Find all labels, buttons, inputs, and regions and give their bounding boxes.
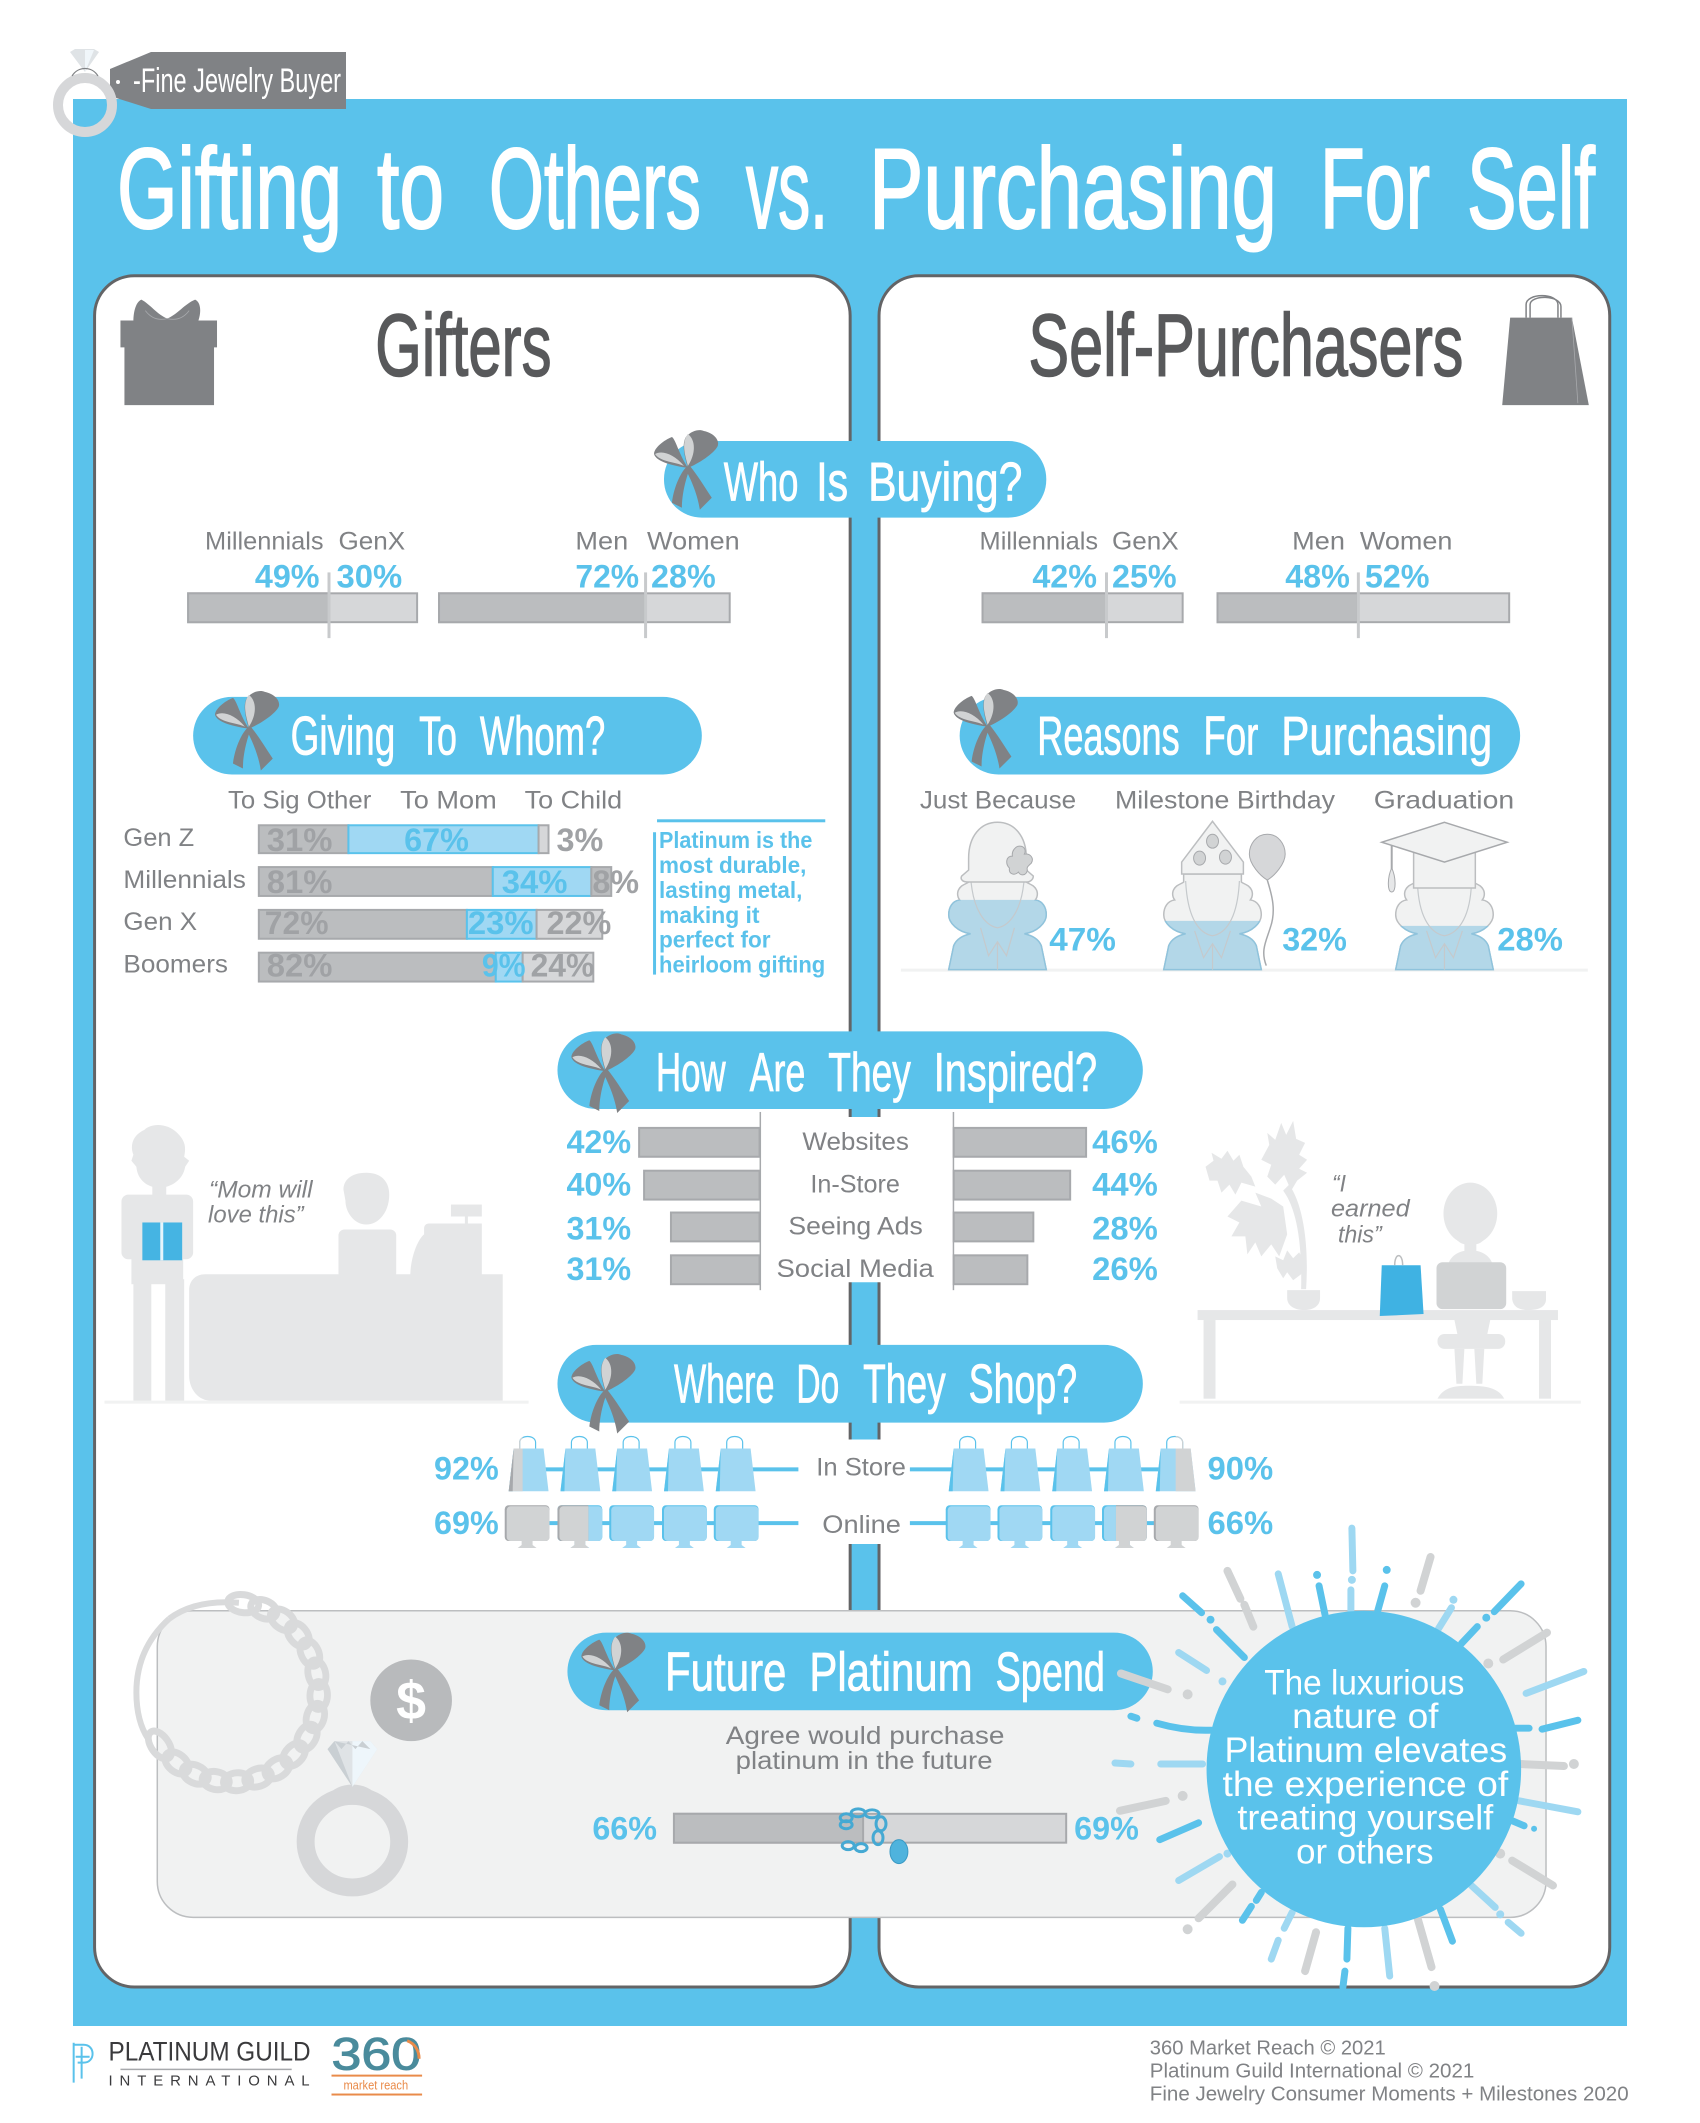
chart: giving to whom: Gen Z (123, 824, 194, 852)
callout circle: luxurious nature: or others (1296, 1833, 1434, 1872)
chart: gifters generation split: Millennials (205, 528, 324, 556)
tag: Fine Jewelry Buyer: -Fine Jewelry Buyer (133, 62, 341, 100)
chart: giving to whom: Gen X (123, 908, 198, 936)
chart: self-purchasers gender split: Men (1292, 528, 1345, 556)
chart: giving to whom: 82% (267, 947, 332, 984)
figure: Just Because: Just Because (920, 786, 1076, 814)
chart: gifters gender split: 28% (651, 557, 716, 594)
chart: how are they inspired: 31% (566, 1209, 631, 1246)
chart: online monitors: 66% (1208, 1504, 1273, 1541)
chart: how are they inspired: 28% (1092, 1209, 1158, 1246)
title: to (377, 126, 444, 253)
pill: Who Is Buying: Buying? (868, 451, 1022, 513)
panel: self-purchasers (879, 276, 1610, 1987)
chart: self-purchasers generation split (980, 528, 1183, 638)
chart: future spend bar: 66% (592, 1810, 657, 1847)
quote: I earned this: earned (1331, 1196, 1410, 1223)
chart: self-purchasers generation split: Millennials (980, 528, 1098, 556)
content area (74, 276, 1629, 2106)
title: Purchasing (869, 126, 1277, 253)
callout: Platinum durable: most durable, (659, 852, 806, 878)
chart: giving to whom: 72% (265, 904, 329, 941)
panel: gifters (95, 276, 850, 1987)
quote: I earned this: this” (1338, 1221, 1383, 1248)
illustration: gift buyer at counter (105, 1125, 529, 1404)
figure: Milestone Birthday: 32% (1282, 921, 1347, 958)
text: agree would purchase (726, 1722, 1004, 1775)
title: Gifting (117, 126, 342, 253)
callout circle: luxurious nature: nature of (1292, 1697, 1439, 1736)
chart: online monitors: 69% (434, 1504, 499, 1541)
chart: giving to whom: 31% (267, 821, 332, 858)
pill: Who Is Buying (654, 430, 1046, 518)
floor line: desk (1180, 1401, 1581, 1404)
white breaks in centre strip (841, 1117, 882, 1544)
logo: Platinum Guild International: PLATINUM GUILD (109, 2037, 311, 2067)
chart: giving to whom: 22% (547, 904, 611, 941)
chart: giving to whom: To Child (525, 786, 622, 814)
icon: shopping bag (1502, 296, 1589, 405)
footer credits (1150, 2038, 1629, 2106)
pill: Reasons For Purchasing: For (1204, 705, 1258, 767)
pill: Where Do They Shop: They (863, 1353, 946, 1415)
figure: Milestone Birthday (1115, 786, 1347, 970)
callout: Platinum durable: perfect for (659, 927, 771, 953)
pill: Giving To Whom: To (419, 705, 457, 767)
chart: self-purchasers gender split: 52% (1365, 557, 1430, 594)
chart: gifters generation split: 49% (255, 557, 320, 594)
chart: gifters generation split: 30% (336, 557, 402, 594)
illustration: self-purchaser at desk (1198, 1121, 1558, 1399)
chart: gifters gender split (439, 528, 740, 638)
logo: 360 market reach: market reach (343, 2078, 408, 2093)
chart: self-purchasers gender split (1217, 528, 1509, 638)
title: Others (489, 126, 701, 253)
callout: Platinum durable: Platinum is the (659, 827, 812, 853)
chart: how are they inspired (566, 1112, 1158, 1290)
chart: how are they inspired: 31% (566, 1250, 631, 1287)
pill: Reasons For Purchasing: Purchasing (1281, 705, 1492, 767)
quote: I earned this (1331, 1171, 1410, 1248)
text: agree would purchase: platinum in the future (736, 1747, 993, 1775)
quote: I earned this: “I (1332, 1171, 1346, 1198)
icon: diamond ring on tag (58, 49, 112, 132)
pill: Who Is Buying: Who (724, 451, 798, 513)
chart: future spend bar: 69% (1074, 1810, 1139, 1847)
chart: giving to whom: 23% (468, 904, 534, 941)
chart: self-purchasers generation split: 25% (1112, 557, 1177, 594)
pill: Future Platinum Spend: Platinum (809, 1640, 973, 1702)
chart: giving to whom: 3% (556, 821, 603, 858)
chart: future spend bar (592, 1809, 1139, 1864)
logo: 360 market reach (332, 2029, 422, 2096)
title: For (1320, 126, 1430, 253)
figure: Graduation: 28% (1497, 921, 1563, 958)
pill: Future Platinum Spend: Future (665, 1640, 786, 1702)
chart: gifters generation split (188, 528, 417, 638)
icon: dollar coin: $ (396, 1671, 426, 1731)
title (117, 126, 1595, 253)
chart: how are they inspired: 40% (566, 1166, 631, 1203)
chart: how are they inspired: 26% (1092, 1250, 1158, 1287)
chart: self-purchasers generation split: GenX (1112, 528, 1179, 556)
chart: how are they inspired: Social Media (776, 1255, 934, 1283)
logo: 360 market reach: 360 (332, 2029, 421, 2080)
icon: dollar coin (370, 1659, 452, 1741)
callout: Platinum durable: heirloom gifting (659, 952, 825, 978)
chart: in store bags (434, 1437, 1273, 1491)
pill: Giving To Whom: Giving (291, 705, 395, 767)
panel: future spend (157, 1611, 1546, 1917)
chart: gifters gender split: Women (647, 528, 740, 556)
chart: giving to whom: 24% (531, 947, 594, 984)
chart: in store bags: In Store (816, 1453, 906, 1481)
chart: how are they inspired: 46% (1092, 1123, 1158, 1160)
figure: Milestone Birthday: Milestone Birthday (1115, 786, 1336, 814)
pill: Future Platinum Spend (567, 1633, 1153, 1712)
callout: Platinum durable (653, 819, 825, 978)
chart: how are they inspired: 42% (566, 1123, 631, 1160)
chart: in store bags: 92% (434, 1449, 499, 1486)
pill: Giving To Whom (193, 691, 702, 774)
chart: how are they inspired: Websites (802, 1128, 909, 1156)
chart: giving to whom (123, 786, 639, 984)
callout circle: luxurious nature: the experience of (1222, 1765, 1509, 1804)
footer credits: Platinum Guild International © 2021 (1150, 2061, 1474, 2083)
pill: How Are They Inspired: Inspired? (934, 1041, 1097, 1103)
footer credits: 360 Market Reach © 2021 (1150, 2038, 1386, 2060)
chart: giving to whom: To Sig Other (228, 786, 371, 814)
pill: Where Do They Shop: Shop? (969, 1353, 1077, 1415)
tag: Fine Jewelry Buyer (110, 52, 346, 109)
pill: Reasons For Purchasing: Reasons (1037, 705, 1180, 767)
title: Self (1467, 126, 1595, 253)
chart: online monitors (434, 1504, 1273, 1548)
figure: Graduation (1374, 786, 1563, 970)
chart: giving to whom: 67% (404, 821, 469, 858)
logo: Platinum Guild International: INTERNATIONAL (109, 2073, 310, 2090)
pill: Where Do They Shop: Where (674, 1353, 774, 1415)
pill: Giving To Whom: Whom? (480, 705, 605, 767)
chart: gifters gender split: Men (575, 528, 628, 556)
chart: self-purchasers generation split: 42% (1032, 557, 1097, 594)
callout circle: luxurious nature: Platinum elevates (1224, 1731, 1507, 1770)
callout circle: luxurious nature: The luxurious (1264, 1663, 1464, 1702)
callout: Platinum durable: lasting metal, (659, 877, 802, 903)
quote: Mom will love this: love this” (208, 1201, 305, 1228)
title: vs. (746, 126, 828, 253)
pill: How Are They Inspired: Are (750, 1041, 805, 1103)
figure: Just Because (920, 786, 1116, 970)
sunburst rays (1115, 1528, 1584, 1991)
figure: Graduation: Graduation (1374, 786, 1514, 814)
chart: how are they inspired: 44% (1092, 1166, 1158, 1203)
chart: giving to whom: 9% (482, 947, 526, 984)
chart: self-purchasers gender split: 48% (1285, 557, 1350, 594)
pill: How Are They Inspired: They (828, 1041, 911, 1103)
chart: gifters generation split: GenX (338, 528, 406, 556)
pill: Who Is Buying: Is (816, 451, 848, 513)
text: agree would purchase: Agree would purchase (726, 1722, 1004, 1750)
chart: giving to whom: Boomers (123, 951, 228, 979)
chart: in store bags: 90% (1208, 1449, 1273, 1486)
logo: Platinum Guild International (74, 2037, 311, 2090)
pill: How Are They Inspired (557, 1031, 1143, 1113)
heading: Self-Purchasers: Self-Purchasers (1028, 295, 1463, 394)
quote: Mom will love this (208, 1177, 313, 1228)
chart: how are they inspired: Seeing Ads (788, 1212, 923, 1240)
chart: self-purchasers gender split: Women (1360, 528, 1452, 556)
chart: giving to whom: 8% (592, 863, 639, 900)
heading: Gifters: Gifters (375, 295, 552, 394)
pill: Where Do They Shop: Do (796, 1353, 839, 1415)
chart: giving to whom: To Mom (400, 786, 497, 814)
floor line: reasons (901, 969, 1588, 972)
icon: platinum ring (306, 1741, 399, 1887)
chart: giving to whom: 81% (267, 863, 332, 900)
icon: chain bracelet (136, 1593, 328, 1792)
chart: how are they inspired: In-Store (810, 1171, 900, 1199)
pill: How Are They Inspired: How (656, 1041, 726, 1103)
quote: Mom will love this: “Mom will (209, 1177, 313, 1204)
chart: giving to whom: Millennials (123, 866, 246, 894)
footer credits: Fine Jewelry Consumer Moments + Milestones 2020 (1150, 2084, 1629, 2106)
chart: online monitors: Online (822, 1511, 901, 1539)
chart: giving to whom: 34% (502, 863, 567, 900)
callout circle: luxurious nature: treating yourself (1237, 1799, 1494, 1838)
figure: Just Because: 47% (1049, 921, 1116, 958)
callout circle: luxurious nature (1207, 1611, 1521, 1927)
chart: gifters gender split: 72% (575, 557, 639, 594)
pill: Future Platinum Spend: Spend (995, 1640, 1105, 1702)
icon: gift box (120, 300, 217, 405)
pill: Reasons For Purchasing (954, 689, 1520, 774)
callout: Platinum durable: making it (659, 902, 760, 928)
pill: Where Do They Shop (557, 1345, 1143, 1434)
